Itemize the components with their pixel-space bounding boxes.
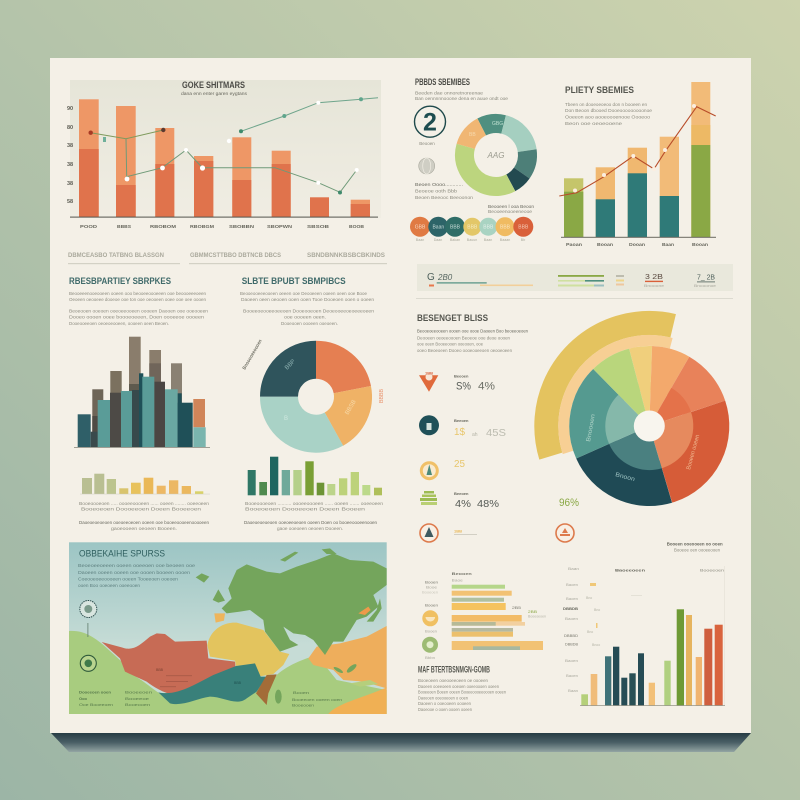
icon: teal stat: Beeoen	[454, 418, 469, 423]
section labels strip	[68, 253, 387, 264]
legend captions: Daan	[434, 238, 442, 242]
paragraph: Booeeoeooeeoeeoen Dooeooeoen Deoeooeeoeoeeeoeen	[243, 308, 375, 314]
bar labels: Bbbn	[425, 655, 435, 660]
panel: world map	[69, 542, 387, 714]
side text	[415, 182, 535, 214]
top right label of bottom chart: Booeen ooeooeen oo ooen	[667, 542, 723, 546]
paragraph	[69, 291, 209, 326]
axis labels: Baan	[662, 242, 674, 247]
map region notes: BBB	[156, 668, 164, 672]
axis labels: Booan	[597, 242, 613, 247]
icon: teal stat: ah	[472, 432, 478, 438]
small bar chart	[80, 474, 210, 494]
side text: Beooeenooeeneooe	[488, 209, 533, 214]
icon: orange ring left	[420, 524, 477, 542]
green trend line	[227, 97, 378, 143]
stat: red value: 3 2B	[645, 272, 663, 281]
panel: stacked bar chart	[559, 82, 716, 247]
paragraph: Booeoeen ooeooeeoeen oe oooeen	[418, 678, 488, 683]
panel: horizontal bars	[418, 571, 546, 712]
skyline bar chart	[78, 337, 206, 447]
annotation marks: Bno	[594, 608, 600, 612]
y axis labels	[67, 106, 73, 205]
stat: left progress: 2B0	[437, 273, 453, 282]
icon: green stack stat	[420, 491, 499, 510]
map paragraph: Coeooeoeeoooeen ooeen Tooeeoen ooeoen	[78, 576, 179, 582]
icon: orange bowl	[422, 610, 438, 626]
paragraph: Daoeen ooeeoeen ooeoen ooeeoooen ooeen	[418, 684, 499, 689]
land: south east orange	[328, 687, 387, 714]
bar labels: Booe	[426, 584, 438, 590]
map region notes: BBB	[234, 681, 242, 685]
top right label of bottom chart: Booeoe oen oooeeooen	[674, 548, 720, 552]
icon: top badge	[80, 600, 97, 637]
caption: gaoe ooeoeen oeoeen Dooeen.	[277, 526, 343, 531]
land: islands	[196, 548, 382, 704]
y axis labels: 58	[67, 199, 73, 205]
caption: gaoeooeen oeoeen Booeen.	[111, 526, 177, 531]
legend captions: Bakan	[450, 238, 460, 242]
paragraph: Beooeoeeooeen oooen ooe oooe Daoeen Boo beoeeoeoen	[417, 328, 528, 334]
paper base shadow	[51, 733, 751, 752]
stat: stacked lines	[558, 275, 624, 286]
map legend right: Booen	[293, 690, 309, 695]
legend circles	[410, 217, 533, 237]
x axis labels: RBOBOM	[150, 224, 176, 229]
paragraph: Ooeeon aoo aooeoooenooe Oooeoo	[565, 114, 651, 120]
small bar chart	[248, 457, 382, 495]
map legend right	[292, 690, 342, 708]
icon: triangle stat: Beeoen	[454, 374, 469, 378]
paragraph: Beon ooe oeoeooene	[565, 121, 623, 126]
bar labels: Baoe	[452, 578, 464, 582]
axis labels	[563, 566, 724, 693]
axis labels: Baan	[568, 688, 578, 693]
icon: green stack stat: Beeoen	[454, 491, 469, 496]
side text: Beoen Beeooc Beeoonon	[415, 195, 474, 200]
heading: PLIETY SBEMIES	[565, 85, 634, 96]
caption: Booeoooeoen ..... oooeeoooeen ...... ooeen ........ ooeeoeen	[79, 501, 210, 506]
donut chart: AAG	[487, 151, 504, 160]
green value: 96%	[559, 497, 579, 509]
bar labels: Booen	[425, 580, 438, 584]
panel: top left combo chart	[67, 80, 381, 229]
stat: dark value: Bnooonoe	[694, 284, 716, 288]
section labels strip: DBMCEASBO TATBNG BLASSGN	[68, 253, 164, 259]
map legend right: Booeeoen ooeen ooen	[292, 697, 342, 702]
paragraph: Dooeooeeoen oeoeoeooeen, oooeen oeen Beoen.	[69, 321, 169, 326]
x axis labels: SBOBBN	[229, 224, 254, 229]
map heading: OBBEKAIHE SPURSS	[79, 548, 165, 560]
icon: triangle stat: 4%	[478, 380, 495, 392]
map legend left: Booeooen	[125, 702, 150, 707]
bars	[79, 99, 370, 217]
land: large green	[222, 553, 387, 655]
y axis labels: 38	[67, 181, 73, 187]
x axis labels: BBBS	[117, 224, 131, 229]
paragraph: Beooeooeeeooeen oeeen ooe Deooeeen ooeen oeen ooe Booe	[240, 291, 367, 296]
x axis labels: SBSOB	[307, 224, 330, 229]
axis labels: Booeeoen	[700, 568, 724, 572]
paragraph: Deooeen oeoeeoooen Beoeoe ooe deoe oooen	[417, 336, 510, 340]
pie: BBSB	[345, 399, 358, 416]
stacked bars	[564, 82, 710, 237]
map shapes	[69, 548, 387, 714]
caption: Daoeoeoeoeoen ooeoeeoeoen ooeen Doen oo booeeoooeenooen	[244, 520, 377, 525]
icon: green stack stat: 48%	[477, 498, 499, 510]
axis labels: Booan	[692, 242, 708, 247]
radial pie: Booeen ooeen	[686, 434, 701, 471]
icon: triangle stat: S%	[456, 380, 471, 392]
map legend left: Ooe Booeeoen	[79, 702, 113, 707]
section labels strip: GBMMCSTTBBO DBTNCB DBCS	[190, 253, 281, 259]
map paragraph	[78, 563, 196, 588]
heading: BESENGET BLISS	[417, 313, 488, 323]
axis labels: DBBDB	[563, 606, 578, 611]
chart title: GOKE SHITMARS	[182, 80, 245, 90]
axis labels: Baoen	[566, 673, 578, 678]
land: east orange	[308, 626, 387, 688]
map legend right: Booeooen	[292, 702, 314, 708]
annotation marks: Bno	[586, 596, 592, 600]
map paragraph: Daoeen ooeen ooeen ooe oooen booeen oooen	[78, 570, 191, 575]
stat strip	[416, 264, 733, 299]
paragraph: Don Beoon dbooed Dooeooooooooonoe	[565, 108, 653, 113]
land: accents	[358, 607, 371, 615]
paper sheet	[50, 58, 751, 733]
legend captions	[416, 238, 525, 242]
icon: number badge	[414, 106, 446, 137]
y axis labels: 90	[67, 106, 73, 112]
legend captions: Baan	[484, 238, 492, 242]
stat: left progress: G	[427, 272, 435, 283]
axis labels: Baoen	[566, 582, 578, 587]
panel: large radial chart	[417, 297, 778, 555]
pie	[266, 346, 366, 447]
paragraph	[565, 102, 653, 126]
caption	[244, 501, 384, 531]
legend circles: GBB	[415, 224, 426, 230]
caption: Booeoeoen Doooeeoen Doeen Booeen	[245, 506, 366, 512]
caption	[79, 501, 210, 531]
paragraph: Beooeeenooeooeen ooeen ooo beooeeoooeeen ooe beoooeeeoeen	[69, 291, 206, 296]
paragraph: ooe oeen Booeeooen ooeooen, ooe	[417, 342, 483, 346]
legend circles: BBB	[483, 224, 494, 230]
paragraph: Oeoeen oeooeee dooeoe ooe ton ooe oeooeen ooee ooe oee oooen	[69, 297, 206, 302]
bar labels: Booeoen	[422, 590, 438, 594]
icon: globe	[419, 141, 435, 174]
x axis labels: SBOPWN	[267, 224, 292, 229]
icon: lower badge	[80, 655, 96, 671]
legend circles: BBB	[467, 224, 478, 230]
caption: Booeoeoen Doooeeoen Doeen Booeeoen	[81, 506, 202, 512]
land: yellow	[207, 623, 289, 677]
bar labels: 2BB	[528, 609, 537, 614]
bars	[581, 609, 723, 706]
bars	[452, 585, 543, 650]
pie: BBP	[284, 359, 297, 371]
paragraph: Beoeooen ooeoen ooeoeeooeen oooeen Daooen ooe ooeooeen	[69, 308, 209, 314]
icon: globe: Beooen	[419, 141, 435, 146]
icon: orange stat	[420, 459, 465, 480]
panel: top right donut	[410, 77, 540, 242]
annotation marks	[586, 583, 642, 647]
donut chart	[452, 111, 540, 199]
icon: green circle	[422, 637, 438, 653]
heading: RBESBPARTIEY SBRPKES	[69, 276, 171, 286]
heading: PBBDS SBEMIBES	[415, 77, 470, 87]
panel: bottom vertical bars	[563, 566, 725, 706]
legend circles: BBB	[518, 224, 529, 230]
axis labels: Baoen	[565, 616, 578, 621]
legend circles: BBB	[450, 224, 461, 230]
map legend left: Ooo	[79, 696, 88, 701]
caption: Daoeoeoeoeoen ooeoeeoeoen ooeen ooe booeeoooeenooooeen	[79, 520, 209, 525]
y axis labels: 80	[67, 125, 73, 131]
icon: orange stat: 25	[454, 459, 465, 470]
intro text: Ban oennnnnooone dena en auue ondt ooe	[415, 96, 509, 101]
paragraph: ooe oooeen oeen.	[284, 314, 326, 320]
stat: red value	[644, 272, 664, 288]
icon: triangle stat	[419, 370, 495, 392]
bar labels: Beooen	[452, 571, 472, 576]
paragraph: Daoeen oeen oeooen ooen ooen Tooe Dooeoen ooen o ooeen	[241, 297, 375, 302]
paragraph: Daoeooe o ooen oooen ooeen	[418, 707, 472, 712]
icon: green stack stat: 4%	[455, 498, 471, 510]
map paragraph: Beoeoeeoeeen ooeen ooeeoen ooe beoeen ooe	[78, 563, 196, 568]
icon: triangle stat: 1BB	[425, 370, 433, 376]
legend captions: Baan	[416, 238, 424, 242]
intro text: Beeden dae onnoretnoreenae	[415, 90, 484, 96]
bar labels	[422, 571, 546, 660]
icon: orange ring right	[556, 524, 574, 542]
axis labels: DBBBD	[564, 633, 578, 638]
legend captions: Bauun	[467, 238, 477, 242]
heading: MAF BTERTBSNMGN-GOMB	[418, 664, 490, 674]
heading: SLBTE BPUBT SBMPIBCS	[242, 276, 346, 286]
icon: teal stat: 1$	[454, 427, 465, 438]
lower green line	[125, 139, 359, 194]
section labels strip: SBNDBNNKBSBCBKINDS	[307, 253, 385, 259]
land: lower green	[69, 631, 387, 714]
paragraph: Tbeen on dooeoeoeoo don n booeen en	[565, 102, 648, 107]
radial pie: Bnoon	[614, 472, 635, 483]
axis labels: Baoeeoeen	[615, 568, 646, 572]
x axis labels: POOD	[80, 224, 98, 229]
side text: Beooeen l ooa Beoon	[488, 204, 535, 209]
paragraph: Daoeoen ooeooeoen o ooen	[418, 696, 468, 700]
caption: Booeoooeoen .......... oooeeoooeen ...... ooeen ....... ooeeoeen	[245, 501, 384, 506]
curved label: Bnooooeeoooen	[242, 339, 264, 371]
paragraph	[417, 328, 528, 353]
side text: Beoeoe ooth Bbb	[415, 188, 458, 194]
side label: BBBB	[379, 388, 385, 403]
donut chart: GBG	[492, 121, 503, 127]
stat: dark value: 7_ 2B	[697, 272, 715, 282]
stat: left progress	[427, 272, 533, 286]
paragraph	[240, 291, 375, 326]
land: red	[102, 633, 236, 695]
map paragraph: ooen Boo ooeoeen ooeeooen	[78, 583, 141, 588]
radial pie	[521, 297, 778, 555]
x axis labels: RBOBGM	[190, 224, 214, 229]
pie: B	[284, 416, 288, 422]
paragraph: Booeeoen Boeen ooeen Booeeoooeeoooen ooeen	[418, 690, 506, 694]
paragraph	[418, 678, 506, 712]
bar labels: 2B5	[512, 605, 522, 610]
icon: number badge: 2	[423, 108, 437, 136]
panel: pie chart	[240, 276, 385, 531]
map region notes	[156, 668, 242, 687]
legend captions: Baaan	[500, 238, 510, 242]
chart subtitle: dana enn enter garen eygtans	[181, 91, 248, 96]
axis labels: Dooan	[629, 242, 645, 247]
axis labels	[566, 242, 708, 247]
paragraph: Daoeen o ooeooeen oooeen	[418, 701, 471, 706]
annotation marks: Bno	[587, 630, 593, 634]
icon: teal stat	[419, 415, 506, 439]
radial pie: Bnoooen	[586, 414, 597, 442]
stat: red value: Bnooone	[644, 284, 664, 288]
bar labels: Booeoeoen	[528, 614, 546, 618]
side text: Beoen Oooo............	[415, 182, 463, 187]
y axis labels: 38	[67, 162, 73, 168]
x axis labels: BOOB	[349, 224, 365, 229]
stat: dark value	[694, 272, 716, 288]
panel: skyline bars	[69, 276, 210, 531]
map legend left	[79, 690, 152, 707]
axis labels: Paoan	[566, 242, 582, 247]
axis labels: Baoen	[565, 658, 578, 663]
paragraph: Dooeooen oooeen ooeoeen.	[281, 321, 338, 326]
paragraph: ooeo Beoeoeen Dooeo oooeooeeoen oeooeoeen	[417, 348, 512, 353]
donut chart: BB	[469, 132, 476, 138]
axis labels: Baoen	[566, 596, 578, 601]
legend captions: Bb	[521, 238, 525, 242]
axis labels: DBBDB	[565, 642, 578, 646]
annotation marks: Bnoo	[592, 643, 600, 647]
x axis labels	[80, 224, 365, 229]
paragraph: Dooeo oooen ooee boooeoeeen, Doen oooeeoe oooeen	[69, 314, 205, 320]
land: brown	[256, 674, 277, 705]
upper dark line	[88, 128, 166, 142]
legend circles: BBB	[500, 224, 511, 230]
legend circles: Baan	[432, 224, 444, 230]
map legend left: Dooeeoen ooen	[79, 690, 112, 694]
intro text	[415, 90, 509, 101]
bar labels: Booen	[425, 602, 438, 608]
axis labels: Baan	[568, 566, 579, 571]
icon: orange ring left: 1BB	[454, 528, 462, 534]
bar labels: Booen	[425, 628, 437, 634]
top right label of bottom chart	[667, 542, 723, 552]
land: teal	[158, 663, 267, 704]
icon: teal stat: 45S	[486, 428, 506, 439]
map legend left: Booeeoen	[125, 690, 152, 694]
trend line	[559, 104, 716, 196]
y axis labels: 38	[67, 143, 73, 149]
map legend left: Booeeoe	[125, 696, 150, 701]
